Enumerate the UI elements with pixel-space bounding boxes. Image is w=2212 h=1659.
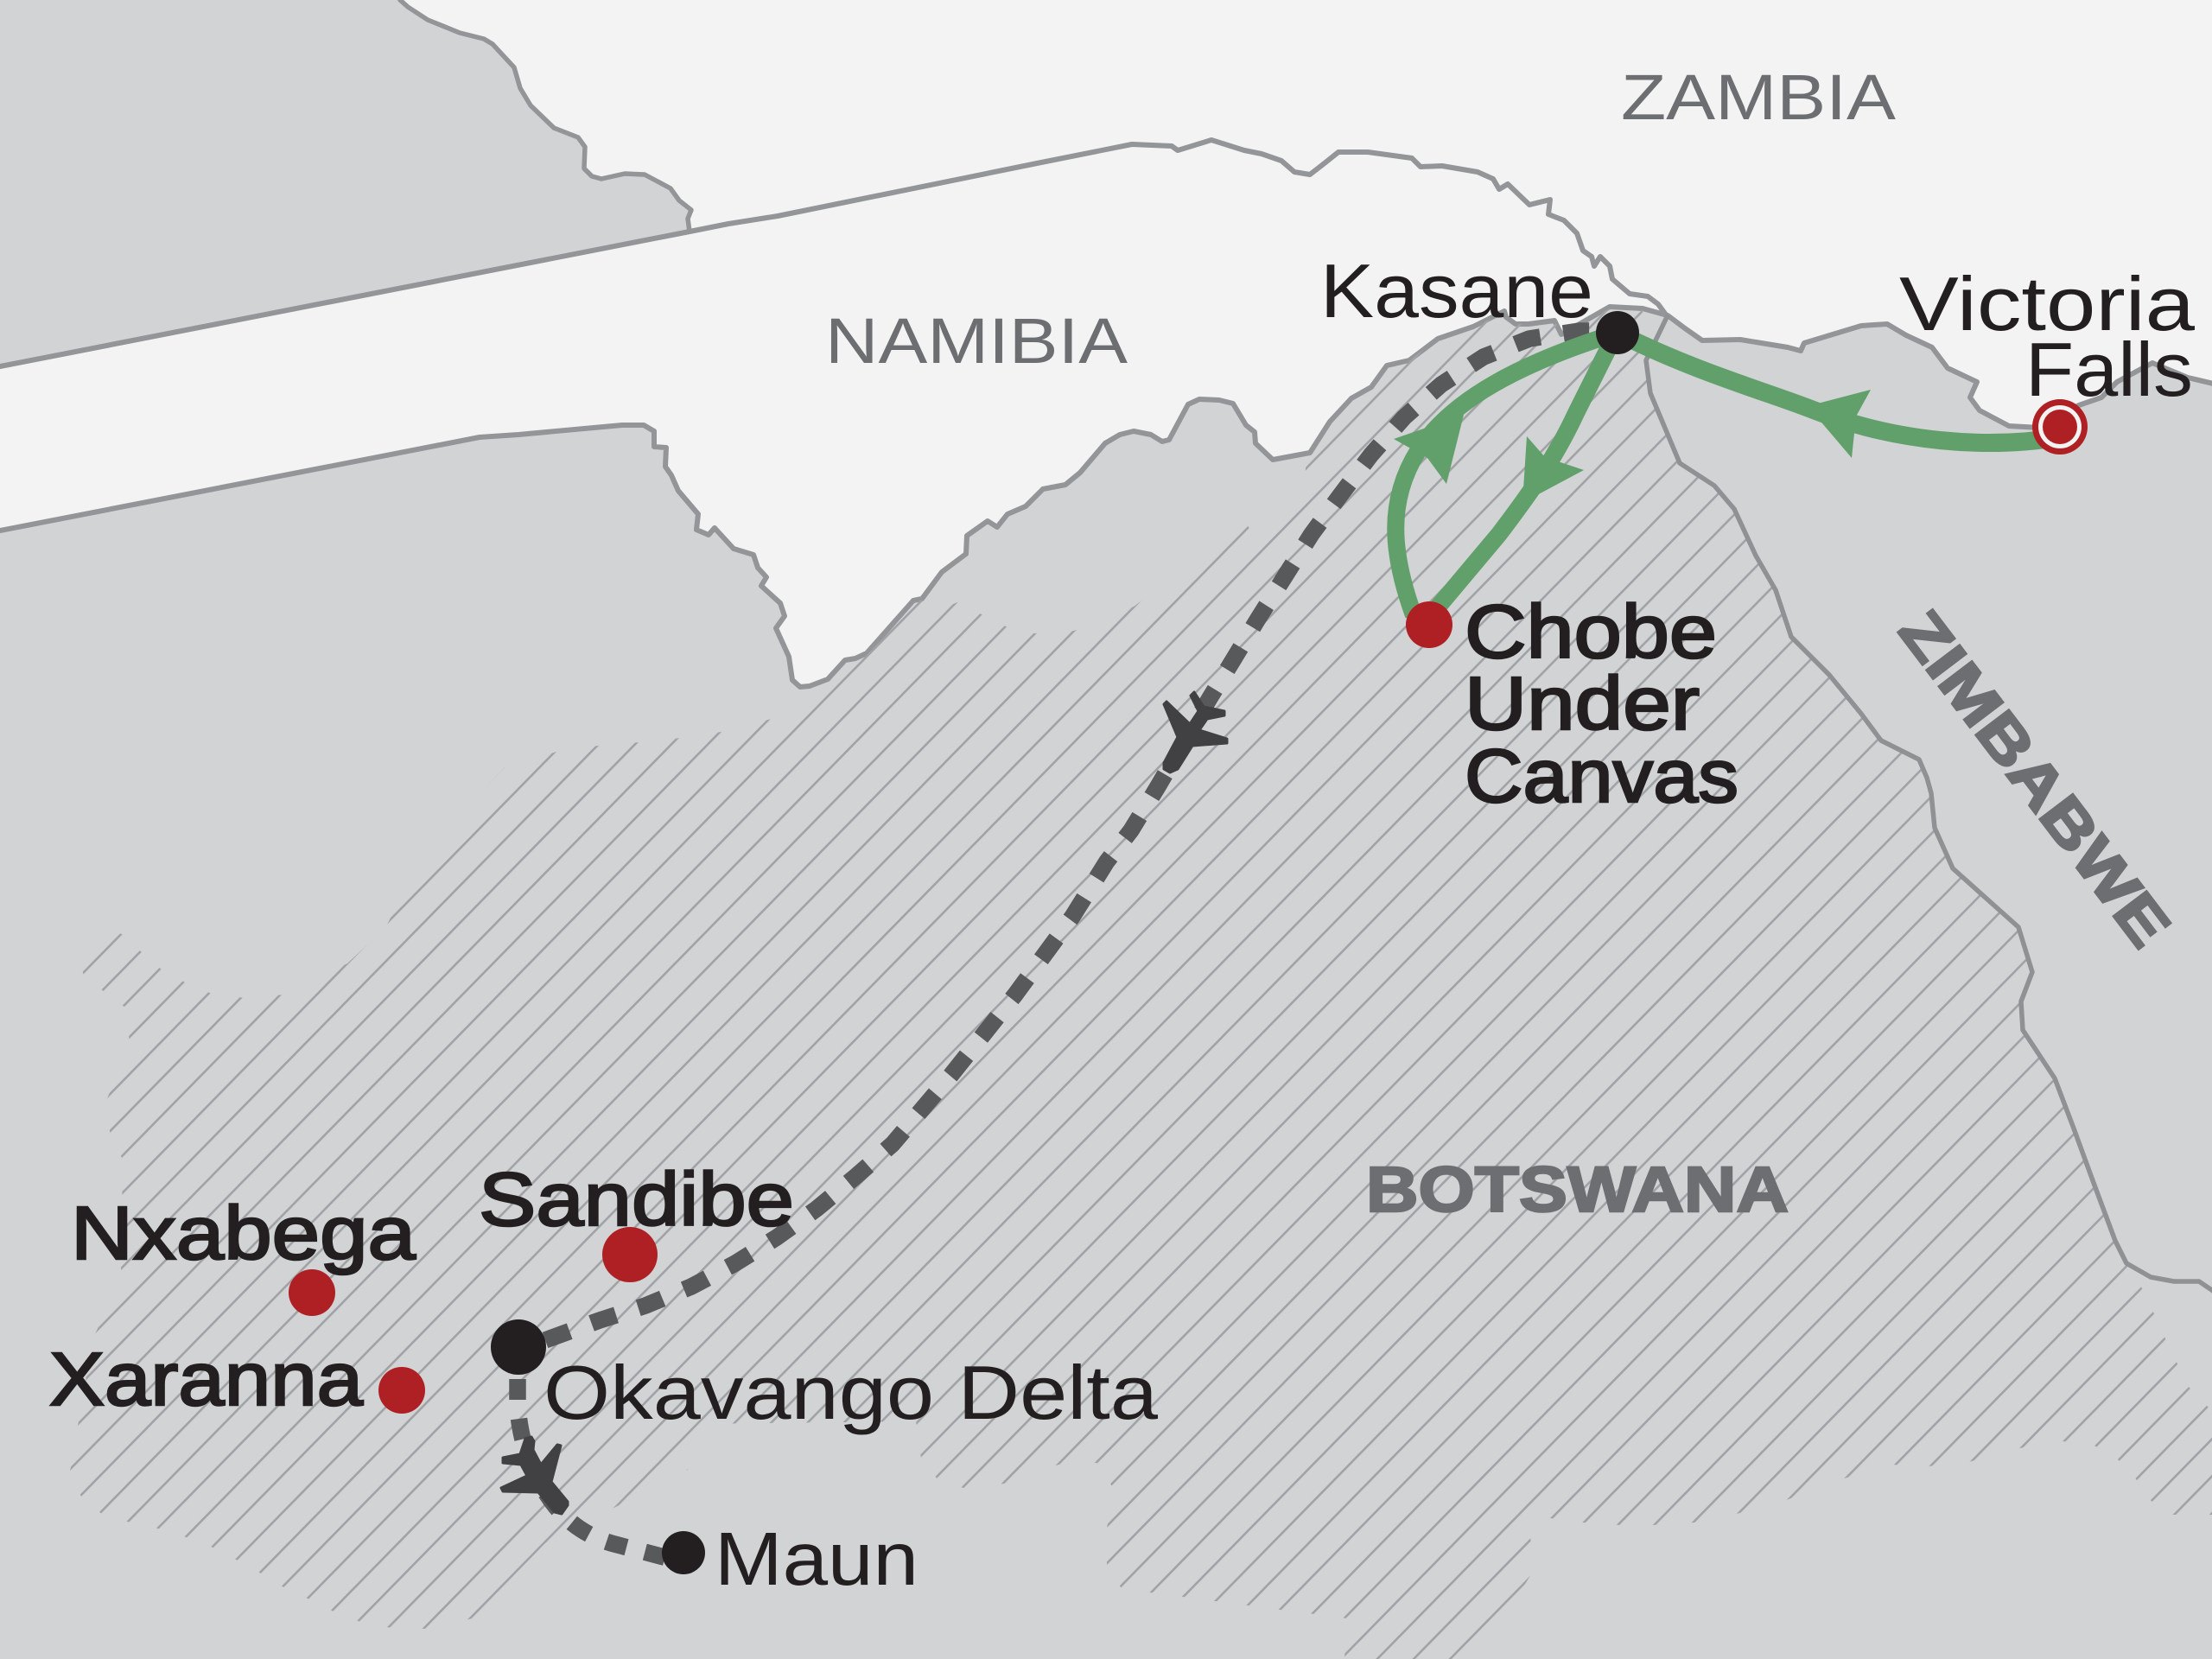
pin: Chobe Under Canvas [1406, 601, 1452, 648]
label: Nxabega: Nxabega [71, 1192, 416, 1275]
pin: Nxabega [289, 1269, 335, 1316]
road route: Victoria Falls to Kasane [1618, 333, 2060, 458]
label: Sandibe: Sandibe [479, 1158, 794, 1242]
label: Victoria Falls: Falls [2025, 327, 2193, 412]
hatched area: Chobe and Okavango reserves [69, 308, 2212, 1659]
pin: Maun [662, 1531, 705, 1574]
arrow: towards Chobe [1522, 436, 1584, 503]
pin: Okavango Delta [491, 1319, 546, 1375]
label: Chobe Under Canvas [1465, 590, 1738, 818]
border: Botswana and Zimbabwe [1646, 315, 2212, 1296]
country label: Botswana: BOTSWANA [1366, 1154, 1789, 1225]
pin: Victoria Falls [2032, 399, 2088, 454]
road route: Kasane to Chobe Under Canvas [1436, 337, 1614, 609]
pin: Xaranna [378, 1367, 425, 1414]
flight route: Okavango Delta to Kasane [545, 331, 1618, 1340]
road route: Chobe Under Canvas to Kasane [1394, 333, 1618, 615]
label: Victoria Falls [1899, 261, 2195, 412]
border: Namibia strip and Zambia [0, 140, 1668, 368]
label: Kasane: Kasane [1320, 248, 1593, 334]
region: Angola [0, 0, 691, 368]
icon: plane on Maun flight [501, 1437, 568, 1514]
country label: Zimbabwe: ZIMBABWE [1886, 598, 2183, 959]
pin: Sandibe [602, 1227, 658, 1282]
label: Victoria Falls: Victoria [1899, 261, 2195, 346]
pin: Kasane [1596, 311, 1639, 354]
icon: plane on Kasane flight [1164, 692, 1227, 772]
label: Okavango Delta: Okavango Delta [543, 1350, 1158, 1435]
country label: Namibia: NAMIBIA [825, 305, 1128, 377]
label: Maun: Maun [715, 1517, 918, 1601]
label: Chobe Under Canvas: Canvas [1465, 734, 1738, 818]
country label: Zambia: ZAMBIA [1621, 61, 1897, 133]
label: Chobe Under Canvas: Under [1465, 662, 1700, 746]
label: Xaranna: Xaranna [49, 1338, 364, 1421]
arrow: towards Kasane [1808, 390, 1871, 458]
label: Chobe Under Canvas: Chobe [1465, 590, 1717, 674]
flight route: Maun to Okavango Delta [518, 1372, 683, 1562]
arrow: towards Kasane [1394, 415, 1464, 484]
